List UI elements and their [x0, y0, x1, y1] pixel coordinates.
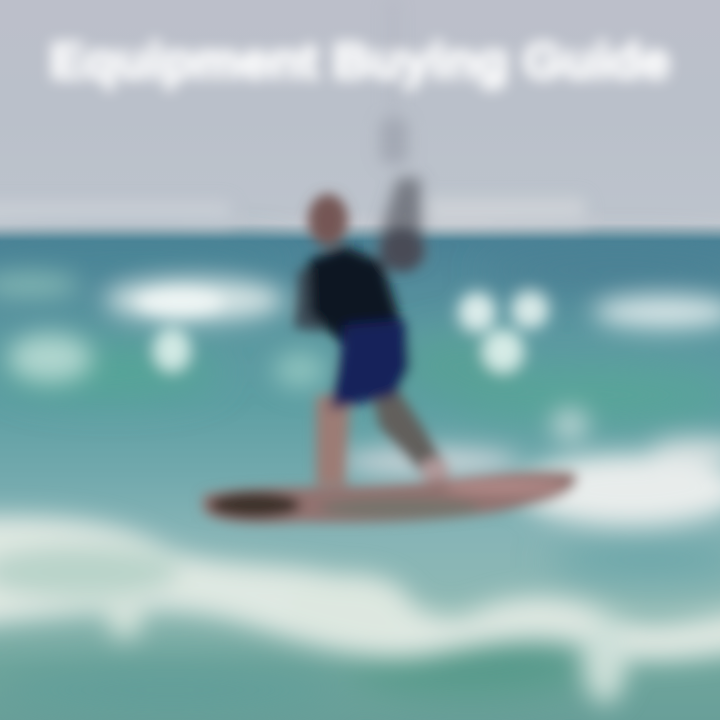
shorts — [330, 320, 410, 410]
raised arm — [380, 228, 424, 272]
torso — [308, 246, 405, 347]
kite lines and control bar — [378, 0, 424, 268]
upper white wave crests — [0, 273, 720, 388]
foreground breaking wave foam — [0, 516, 720, 704]
horizon haze — [0, 198, 585, 224]
head — [308, 194, 348, 246]
kiteboard — [203, 471, 577, 523]
title: Equipment Buying Guide — [50, 33, 670, 89]
kiteboarder — [294, 194, 450, 485]
legs — [316, 395, 350, 485]
foam behind board — [340, 409, 720, 526]
green and teal water bands — [0, 246, 720, 714]
arm — [294, 265, 322, 332]
